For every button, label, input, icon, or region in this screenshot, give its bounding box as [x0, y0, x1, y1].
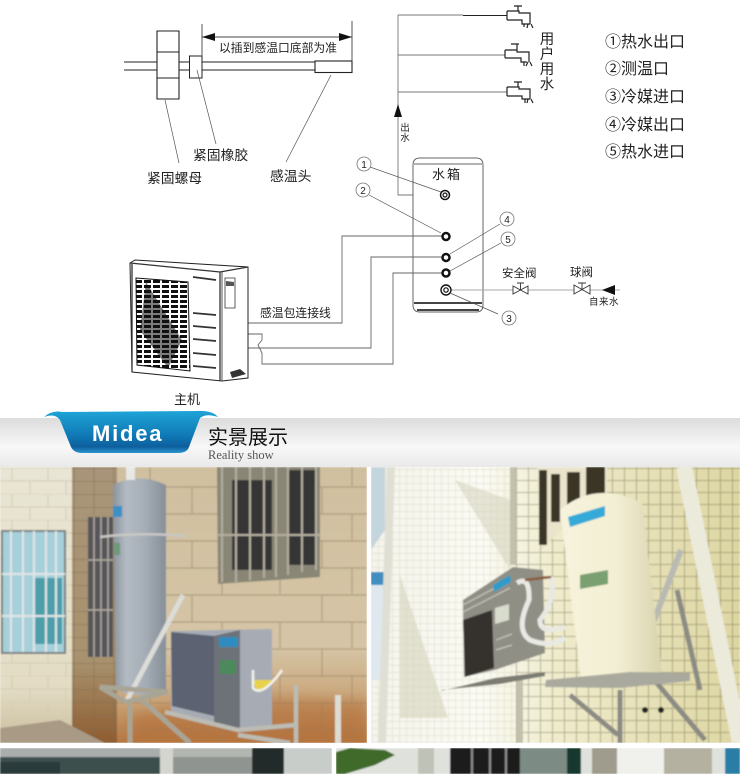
- legend item 5: ⑤热水进口: [605, 143, 685, 161]
- callout 1: 1: [361, 160, 367, 171]
- photo 2: [371, 467, 740, 743]
- port 1: [440, 190, 450, 200]
- label: rubber: 紧固橡胶: [193, 147, 248, 163]
- user water label: [540, 32, 555, 93]
- legend: [605, 33, 685, 161]
- faucet 2: [505, 44, 532, 66]
- brand name: Midea: [92, 421, 163, 446]
- electrical box: [225, 278, 235, 308]
- valves: [230, 369, 246, 378]
- mid window: [88, 517, 113, 657]
- port 4: [442, 254, 450, 261]
- bracket strut: [654, 548, 684, 622]
- label: sensor head: 感温头: [270, 168, 312, 184]
- stand: [100, 687, 190, 743]
- host label: 主机: [174, 392, 200, 407]
- drain pipe right: [684, 467, 740, 743]
- tank body: [413, 158, 483, 312]
- photo 1: [0, 467, 367, 743]
- leader lines: [369, 167, 501, 314]
- cream tank: [560, 493, 662, 680]
- callout 3: [502, 311, 516, 325]
- tank green badge: [580, 570, 608, 589]
- leader lines: [165, 70, 331, 163]
- user water label: 水: [540, 76, 555, 93]
- tank shelf: [545, 672, 690, 688]
- sensor head: [315, 61, 352, 72]
- unit photo: [463, 567, 545, 677]
- grey tank: [113, 478, 166, 695]
- tap water label: 自来水: [589, 296, 619, 308]
- callout 5: [501, 232, 515, 246]
- section title: 实景展示: [208, 426, 288, 449]
- ball valve label: 球阀: [570, 265, 593, 279]
- photo 3: [0, 748, 332, 774]
- rubble: [0, 720, 105, 743]
- callout 2: 2: [360, 186, 366, 197]
- diagram: water tank piping: [229, 6, 620, 370]
- pipe lines: [124, 62, 315, 70]
- rust area: [130, 695, 367, 743]
- user water label: 用: [540, 32, 554, 48]
- callout 5: 5: [505, 235, 511, 246]
- flow arrow: [602, 285, 615, 295]
- ribbon logo: [44, 411, 218, 453]
- left building: [371, 467, 385, 550]
- ball valve: [574, 283, 590, 294]
- port 5: [442, 270, 450, 276]
- fastening nut: [157, 31, 179, 99]
- port 2: [442, 233, 450, 240]
- outlet pipe: [398, 15, 507, 195]
- legend item 1: ①热水出口: [605, 33, 685, 51]
- callout 4: [500, 212, 514, 226]
- section subtitle: Reality show: [208, 448, 274, 462]
- port 3: [441, 285, 451, 295]
- water inlet pipe: [445, 289, 620, 291]
- unit stand: [165, 685, 296, 743]
- outlet arrow: [394, 104, 402, 117]
- side slats: [193, 277, 216, 368]
- outlet label: 出: [400, 122, 410, 134]
- photo 4: [336, 748, 740, 774]
- faucet 3: [507, 82, 533, 103]
- safety valve: [513, 283, 528, 294]
- fan grille: [136, 278, 190, 371]
- diagonal strut: [126, 595, 183, 702]
- rubber seal: [190, 56, 202, 78]
- callout 2: [356, 183, 370, 197]
- user water label: 用: [540, 62, 554, 78]
- tank label: 水箱: [432, 167, 462, 182]
- label: nut: 紧固螺母: [147, 171, 202, 186]
- wall shadow: [400, 575, 448, 718]
- insulated pipes: [517, 577, 565, 644]
- dimension label: 以插到感温口底部为准: [219, 41, 337, 55]
- left window: [2, 531, 65, 653]
- wire label: 感温包连接线: [260, 306, 331, 320]
- feed pipes: [229, 236, 445, 370]
- callout 3: 3: [506, 314, 512, 325]
- icon: outdoor unit: [130, 260, 331, 407]
- right window: [217, 467, 320, 584]
- outlet label 2: 水: [400, 132, 410, 144]
- window: [537, 467, 607, 551]
- user water label: 户: [540, 46, 554, 63]
- section band: [0, 411, 740, 467]
- faucet 1: [507, 6, 533, 28]
- legend item 4: ④冷媒出口: [605, 116, 685, 134]
- outdoor unit photo: [171, 629, 272, 731]
- legend item 3: ③冷媒进口: [605, 88, 685, 106]
- legend item 2: ②测温口: [605, 60, 669, 78]
- tank brand label: [568, 506, 605, 527]
- safety valve label: 安全阀: [502, 266, 536, 280]
- unit shelf: [441, 672, 545, 691]
- callout 4: 4: [504, 215, 510, 226]
- diagram: sensor probe installation: [124, 21, 352, 186]
- dimension arrow: [202, 21, 352, 61]
- callout 1: [357, 157, 371, 171]
- left drain pipes: [382, 467, 391, 743]
